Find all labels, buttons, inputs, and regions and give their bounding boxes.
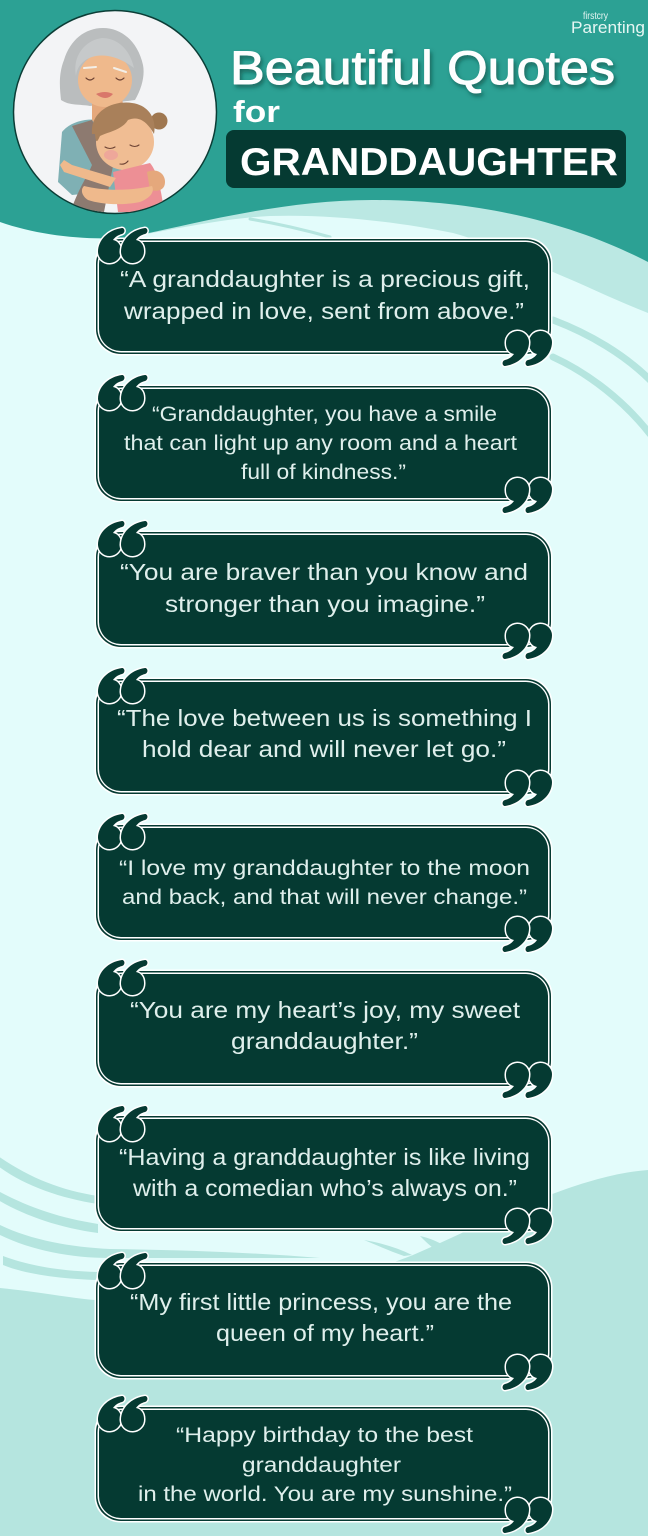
grandmother face [78, 53, 132, 107]
background: top teal band [0, 0, 648, 262]
grandmother scarf [72, 120, 113, 212]
quote card 7 [94, 1106, 552, 1244]
title banner: GRANDDAUGHTER: GRANDDAUGHTER [240, 141, 618, 184]
illustration: grandmother and granddaughter in circle [14, 10, 216, 214]
quote text [119, 856, 530, 909]
quote text: granddaughter [242, 1453, 401, 1477]
close quote mark [503, 478, 552, 513]
quote text [119, 1144, 530, 1201]
background: upper mint wave [130, 195, 648, 313]
background: lower mint wave [0, 1170, 648, 1536]
quote text: “You are braver than you know and [120, 559, 528, 585]
quote text: and back, and that will never change.” [122, 885, 527, 909]
grandmother shawl [58, 120, 125, 195]
quote text: “Granddaughter, you have a smile [152, 402, 497, 426]
open quote mark [98, 960, 147, 995]
open quote mark [98, 375, 147, 410]
grandmother neck [92, 100, 123, 122]
quote text: hold dear and will never let go.” [142, 736, 506, 762]
quote text [130, 1289, 512, 1346]
quote card 8 [94, 1253, 552, 1390]
quote text: that can light up any room and a heart [124, 431, 517, 455]
quote text: queen of my heart.” [216, 1320, 434, 1346]
close quote mark [503, 331, 552, 366]
open quote mark [98, 1253, 147, 1288]
quote text [120, 559, 528, 617]
background: upper right stripes [250, 219, 648, 434]
grandmother eyebrows [84, 67, 126, 72]
close quote mark [503, 1498, 552, 1533]
granddaughter bun [150, 112, 168, 130]
logo: firstcry Parenting: Parenting [571, 18, 645, 37]
title: for: for [233, 94, 280, 129]
grandmother fringe [75, 38, 134, 76]
close quote mark [503, 1209, 552, 1244]
quote text [120, 266, 530, 324]
quote text [124, 402, 517, 484]
quote card 1 [94, 228, 552, 366]
granddaughter lower arm [82, 186, 153, 204]
open quote mark [98, 814, 147, 849]
quote text: “My first little princess, you are the [130, 1289, 512, 1315]
quote text [117, 705, 532, 762]
quote text: “I love my granddaughter to the moon [119, 856, 530, 880]
close quote mark [503, 1063, 552, 1098]
logo: firstcry Parenting: firstcry [583, 11, 608, 22]
granddaughter face [96, 114, 154, 170]
granddaughter dress [113, 163, 164, 212]
open quote mark [98, 668, 147, 703]
quote text: “You are my heart’s joy, my sweet [130, 997, 521, 1023]
quote text: “The love between us is something I [117, 705, 532, 731]
open quote mark [98, 1396, 147, 1431]
quote card 4 [94, 668, 552, 806]
quote text [130, 997, 521, 1054]
open quote mark [98, 521, 147, 556]
background: lower left stripes [0, 1156, 445, 1280]
title: Beautiful Quotes: Beautiful Quotes [230, 41, 615, 94]
open quote mark [98, 1106, 147, 1141]
quote card 9 [94, 1396, 552, 1533]
quote card 6 [94, 960, 552, 1098]
quote card 5 [94, 814, 552, 952]
quote text [138, 1423, 512, 1506]
granddaughter eyes and smile [105, 145, 139, 164]
close quote mark [503, 624, 552, 659]
granddaughter cheek [104, 150, 118, 160]
close quote mark [503, 771, 552, 806]
quote text: stronger than you imagine.” [165, 591, 485, 617]
granddaughter left arm [60, 160, 116, 187]
quote text: granddaughter.” [231, 1028, 418, 1054]
title banner: GRANDDAUGHTER [226, 130, 626, 188]
quote card 3 [94, 521, 552, 659]
quote text: “Happy birthday to the best [176, 1423, 473, 1447]
quote text: in the world. You are my sunshine.” [138, 1482, 512, 1506]
open quote mark [98, 228, 147, 263]
grandmother features [86, 78, 124, 80]
quote text: full of kindness.” [241, 460, 406, 484]
grandmother hair [60, 28, 144, 106]
close quote mark [503, 917, 552, 952]
granddaughter hair [92, 103, 155, 141]
quote text: “Having a granddaughter is like living [119, 1144, 530, 1170]
grandmother mouth [96, 92, 113, 98]
quote text: “A granddaughter is a precious gift, [120, 266, 530, 292]
quote card 2 [94, 375, 552, 513]
quote text: with a comedian who’s always on.” [132, 1175, 517, 1201]
grandmother hand on shoulder [147, 170, 165, 191]
quote text: wrapped in love, sent from above.” [123, 298, 524, 324]
close quote mark [503, 1355, 552, 1390]
